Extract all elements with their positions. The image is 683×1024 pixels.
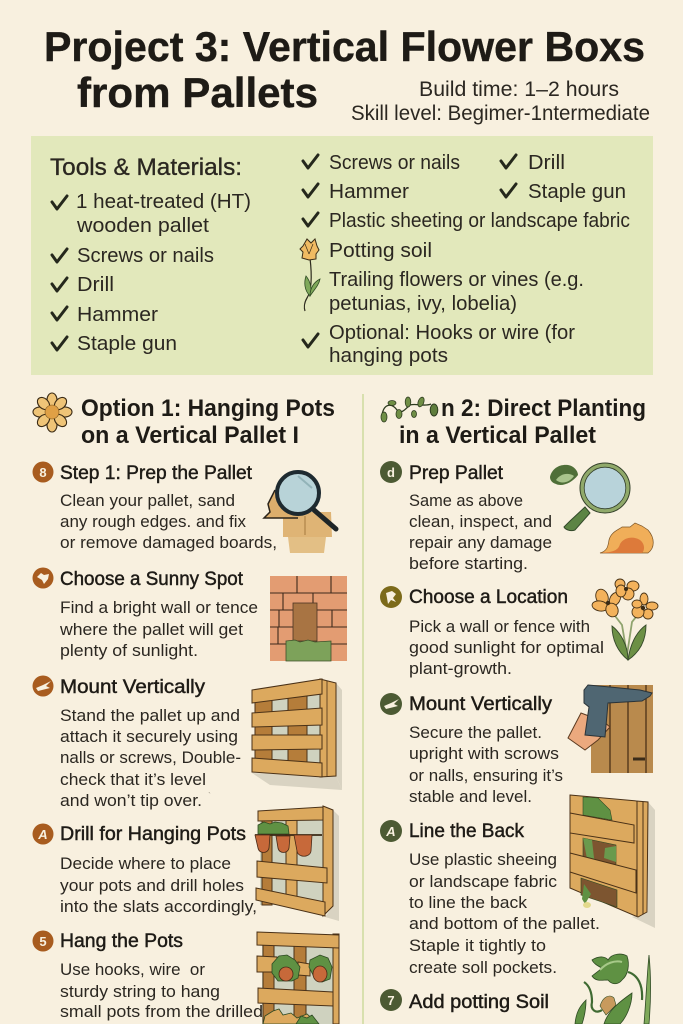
step: choose a location: Choose a Location	[409, 587, 568, 608]
step 4: drill for hanging pots: your pots and drill holes	[60, 876, 244, 895]
icon: magnifying glass over wood	[264, 472, 336, 553]
step: prep pallet: d	[387, 465, 395, 480]
step: line the back: and bottom of the pallet.	[409, 914, 600, 933]
step 1: prep the pallet: Step 1: Prep the Pallet	[60, 463, 253, 484]
step: line the back: A	[385, 824, 396, 839]
icon: green magnifier, leaf and orange blob	[550, 463, 653, 553]
step: mount vertically: Mount Vertically	[409, 694, 553, 715]
step: prep pallet: clean, inspect, and	[409, 512, 552, 531]
illustration: drill on pallet board	[568, 685, 653, 773]
title: Project 3: Vertical Flower Boxs	[44, 23, 645, 70]
materials list: right column: Potting soil	[329, 239, 432, 262]
step 2: choose a sunny spot: Find a bright wall or tence	[60, 598, 258, 617]
step 5: hang the pots	[32, 930, 263, 1021]
step 2: choose a sunny spot: plenty of sunlight.	[60, 641, 198, 660]
column divider	[362, 394, 364, 1024]
step 5: hang the pots: Use hooks, wire or	[60, 960, 205, 979]
icon: vine	[381, 396, 438, 422]
step 4: drill for hanging pots: A	[37, 827, 48, 842]
materials list: right column: Screws or nails	[329, 151, 460, 174]
materials list: right column: Staple gun	[528, 180, 626, 203]
step 1: prep the pallet: Clean your pallet, sand	[60, 491, 235, 510]
materials list: right column: Plastic sheeting or landscape fabric	[329, 209, 630, 232]
heading: option 2: n 2: Direct Planting	[441, 395, 646, 422]
materials list: left column: Drill	[77, 273, 114, 296]
build time and skill level: Skill level: Begimer-1ntermediate	[351, 102, 650, 125]
heading: option 2	[399, 395, 646, 449]
materials list: right column: petunias, ivy, lobelia)	[329, 292, 517, 315]
materials list: left column: Screws or nails	[77, 244, 214, 267]
step: line the back: Line the Back	[409, 821, 524, 842]
illustration: trailing plant	[575, 954, 650, 1024]
illustration: bare pallet	[252, 679, 342, 790]
step: line the back: Use plastic sheeing	[409, 850, 557, 869]
panel: option 1 hanging pots	[32, 393, 347, 1024]
illustration: pallet with pots	[255, 806, 339, 921]
heading: option 2: in a Vertical Pallet	[399, 422, 596, 449]
step: line the back: to line the back	[409, 893, 528, 912]
step: mount vertically: stable and level.	[409, 787, 532, 806]
step 3: mount vertically: Mount Vertically	[60, 677, 206, 698]
step 1: prep the pallet: any rough edges. and fix	[60, 512, 246, 531]
step 2: choose a sunny spot	[32, 568, 258, 660]
step 3: mount vertically	[32, 676, 241, 810]
build time and skill level: Build time: 1–2 hours	[419, 78, 619, 101]
step: line the back	[380, 820, 600, 977]
step: line the back: or landscape fabric	[409, 872, 558, 891]
heading: option 1	[81, 395, 335, 449]
materials list: left column: Hammer	[77, 303, 158, 326]
step 1: prep the pallet: 8	[39, 465, 47, 480]
icon: sunflower	[33, 393, 72, 432]
panel: option 2 direct planting	[380, 395, 658, 1024]
step 5: hang the pots: small pots from the drilled	[60, 1002, 263, 1021]
step 7: add potting soil: Add potting Soil	[409, 992, 549, 1013]
step: prep pallet: repair any damage	[409, 533, 552, 552]
materials list: right column: hanging pots	[329, 344, 448, 367]
step 7: add potting soil: 7	[387, 993, 395, 1008]
illustration: pallet with planting pockets	[570, 795, 655, 928]
step 4: drill for hanging pots: into the slats accordingly,	[60, 897, 257, 916]
materials list: right column: Drill	[528, 151, 565, 174]
illustration: orange flowers	[591, 579, 658, 660]
step 3: mount vertically: Stand the pallet up and	[60, 706, 240, 725]
illustration: pallet with hanging pots	[257, 932, 339, 1024]
step 3: mount vertically: and won’t tip over.	[60, 791, 202, 810]
title	[44, 23, 645, 116]
step 3: mount vertically: attach it securely using	[60, 727, 238, 746]
materials list: right column	[303, 151, 630, 367]
step: prep pallet: Prep Pallet	[409, 463, 504, 484]
materials list: left column: wooden pallet	[76, 214, 209, 237]
step: prep pallet	[380, 461, 552, 573]
title: from Pallets	[77, 69, 318, 116]
step: prep pallet: before starting.	[409, 554, 528, 573]
step: choose a location: plant-growth.	[409, 659, 512, 678]
step 5: hang the pots: Hang the Pots	[60, 931, 183, 952]
heading: option 1: on a Vertical Pallet I	[81, 422, 299, 449]
materials list: right column: Trailing flowers or vines (e.g.	[329, 268, 584, 291]
step: choose a location: good sunlight for optimal	[409, 638, 604, 657]
step 2: choose a sunny spot: where the pallet will get	[59, 620, 243, 639]
step: mount vertically	[380, 693, 563, 806]
step 4: drill for hanging pots	[32, 824, 257, 916]
step: choose a location: Pick a wall or fence with	[409, 617, 590, 636]
heading: tools and materials: Tools & Materials:	[50, 154, 242, 181]
illustration: brick wall	[270, 576, 347, 661]
step 3: mount vertically: `	[208, 791, 211, 801]
step 1: prep the pallet: or remove damaged boards,	[60, 533, 277, 552]
materials list: right column: Optional: Hooks or wire (for	[329, 321, 575, 344]
step 1: prep the pallet	[32, 462, 277, 552]
step 4: drill for hanging pots: Decide where to place	[60, 854, 231, 873]
icon: flower on stem	[300, 239, 320, 311]
step: choose a location	[380, 586, 604, 678]
step 5: hang the pots: 5	[39, 934, 47, 949]
materials list: right column: Hammer	[329, 180, 409, 203]
step 7: add potting soil	[380, 989, 549, 1013]
step 4: drill for hanging pots: Drill for Hanging Pots	[60, 824, 246, 845]
step: prep pallet: Same as above	[409, 491, 523, 510]
step: mount vertically: upright with scrows	[409, 744, 559, 763]
step: mount vertically: or nalls, ensuring it’s	[409, 766, 563, 785]
step 3: mount vertically: nalls or screws, Double-	[60, 748, 241, 767]
step: line the back: Staple it tightly to	[409, 936, 546, 955]
heading: option 1: Option 1: Hanging Pots	[81, 395, 335, 422]
step 3: mount vertically: check that it’s level	[60, 770, 206, 789]
step: mount vertically: Secure the pallet.	[409, 723, 542, 742]
panel: tools and materials	[31, 136, 653, 375]
materials list: left column: Staple gun	[77, 332, 177, 355]
step 5: hang the pots: sturdy string to hang	[60, 982, 220, 1001]
build time and skill level	[351, 78, 650, 125]
materials list: left column: 1 heat-treated (HT)	[76, 190, 251, 213]
materials list: left column	[52, 190, 251, 355]
step 2: choose a sunny spot: Choose a Sunny Spot	[60, 569, 244, 590]
step: line the back: create soll pockets.	[409, 958, 557, 977]
